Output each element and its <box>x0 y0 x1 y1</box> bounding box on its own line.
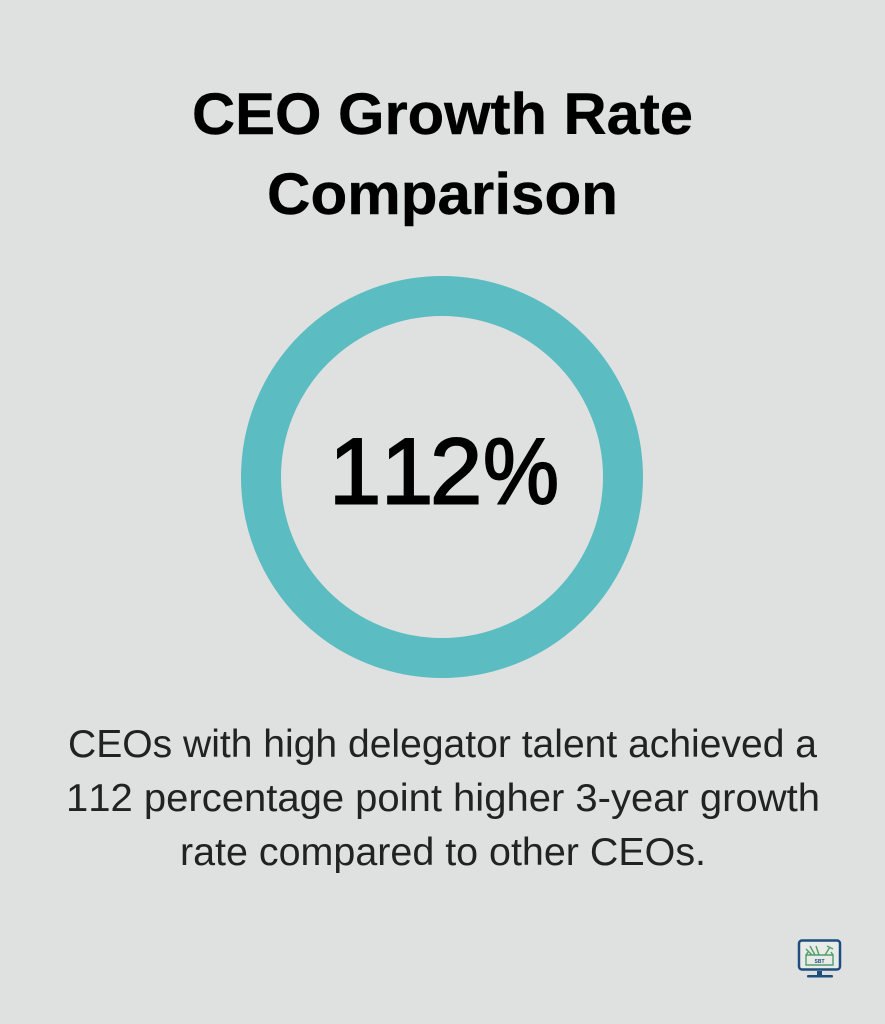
description text <box>66 723 820 874</box>
icon: monitor with toolbox logo: SBT <box>814 959 824 965</box>
description text: 112 percentage point higher 3-year growth <box>66 777 820 820</box>
donut chart: 112%: 2 <box>430 418 482 524</box>
description text: CEOs with high delegator talent achieved a <box>68 723 818 766</box>
title: Comparison <box>267 162 618 227</box>
description text: rate compared to other CEOs. <box>180 831 706 874</box>
title <box>192 82 693 227</box>
donut chart: 112%: % <box>483 418 559 524</box>
donut chart: 112%: 1 <box>329 418 381 524</box>
title: CEO Growth Rate <box>192 82 693 147</box>
donut chart: 112% <box>261 296 623 658</box>
donut chart: 112%: 1 <box>381 418 433 524</box>
icon: monitor with toolbox logo <box>799 940 840 978</box>
